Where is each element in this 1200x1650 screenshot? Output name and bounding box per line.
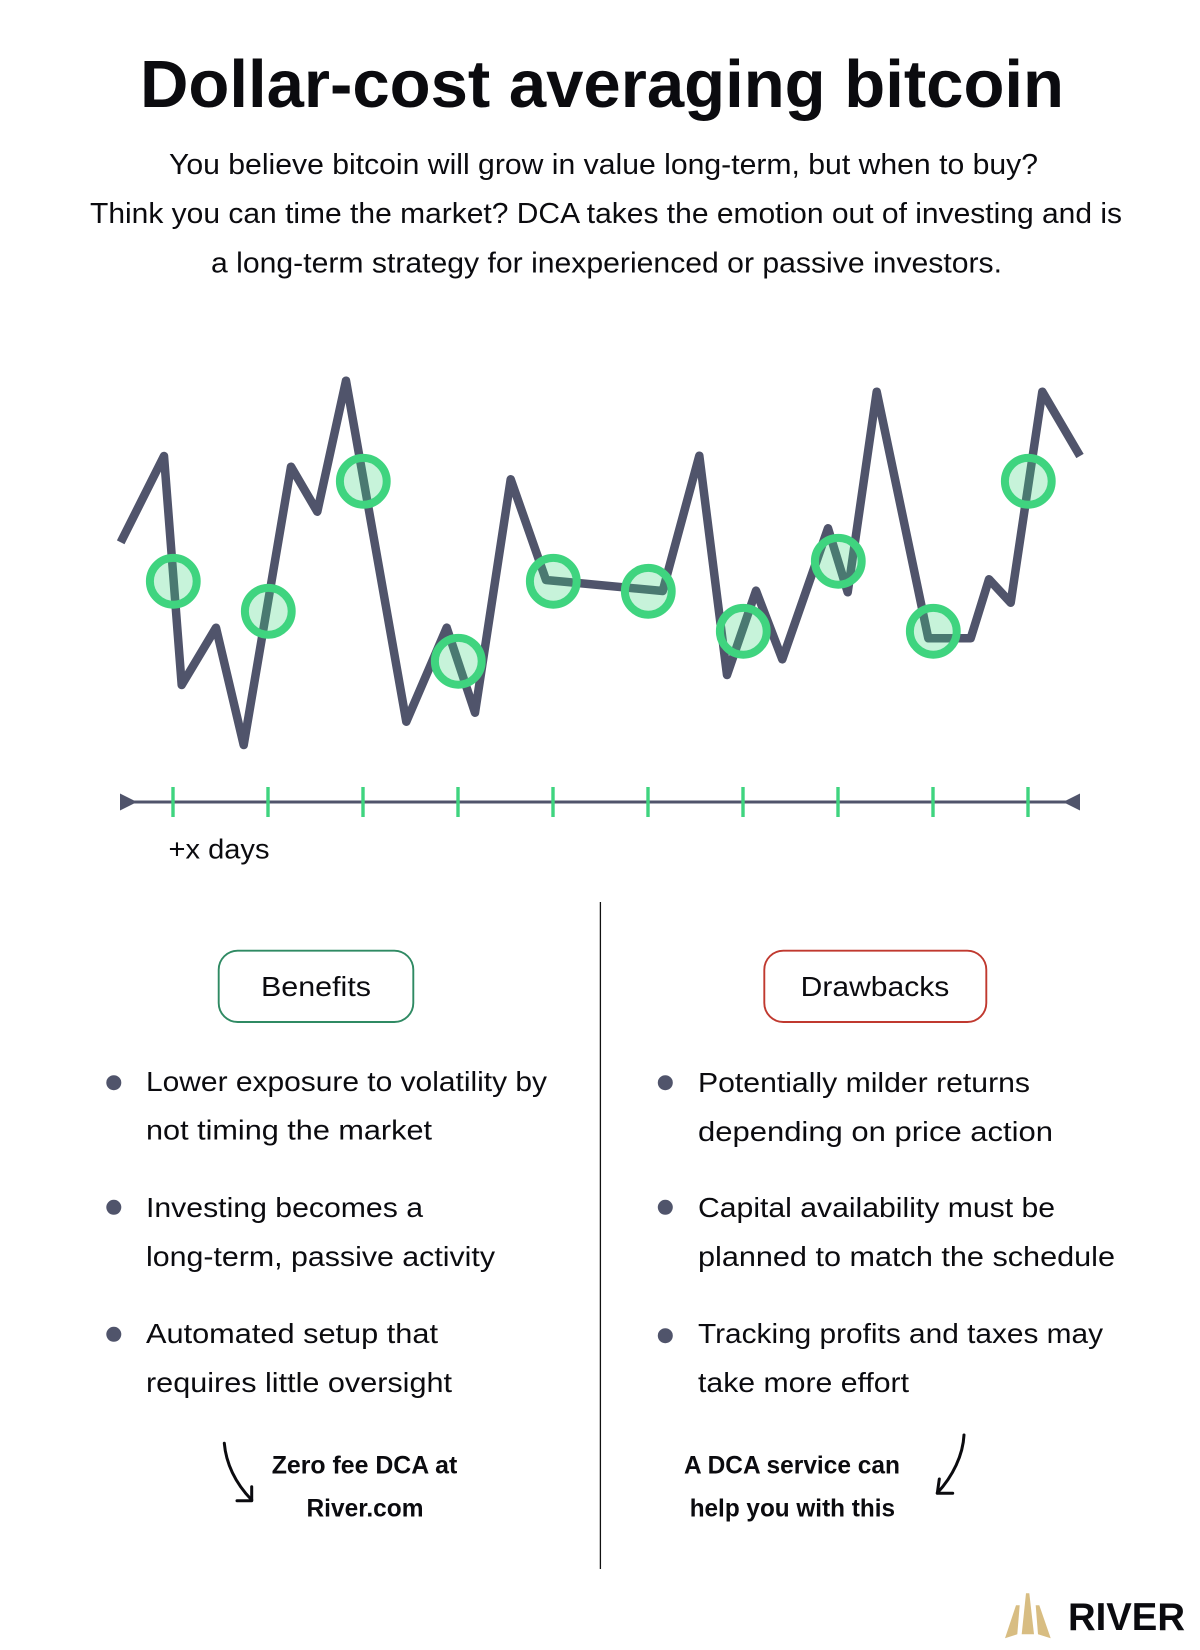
axis label: +x days: [168, 834, 270, 864]
panel: benefits: [106, 951, 547, 1523]
callout: DCA service: help you with this: [690, 1494, 895, 1522]
icon: River mark: [1005, 1593, 1051, 1638]
benefit 2: long-term, passive activity: [146, 1241, 495, 1272]
drawback 3: [658, 1318, 1103, 1398]
intro text block: Think you can time the market? DCA takes the emotion out of investing and is: [90, 198, 1122, 230]
drawback 2: [658, 1192, 1115, 1272]
benefit 3: [106, 1318, 452, 1398]
benefit 1: Lower exposure to volatility by: [146, 1066, 547, 1097]
icon: arrow to River note: [224, 1443, 252, 1501]
callout: zero fee: River.com: [306, 1495, 424, 1523]
drawback 1: Potentially milder returns: [698, 1067, 1030, 1098]
callout: DCA service: A DCA service can: [684, 1452, 900, 1480]
benefit 3: Automated setup that: [146, 1318, 438, 1349]
purchase markers: [150, 458, 1052, 685]
icon: arrow to service note: [937, 1435, 964, 1493]
benefits heading: [219, 951, 413, 1022]
intro text block: You believe bitcoin will grow in value long-term, but when to buy?: [169, 149, 1038, 181]
drawback 1: depending on price action: [698, 1116, 1053, 1147]
benefits heading: Benefits: [261, 971, 371, 1002]
intro text block: a long-term strategy for inexperienced or passive investors.: [211, 248, 1002, 280]
drawbacks heading: [764, 951, 986, 1022]
drawback 2: Capital availability must be: [698, 1192, 1055, 1223]
drawbacks heading: Drawbacks: [801, 971, 949, 1002]
benefit 3: requires little oversight: [146, 1367, 452, 1398]
drawback 3: take more effort: [698, 1367, 909, 1398]
logo: River: [1005, 1593, 1185, 1639]
title: Dollar-cost averaging bitcoin: [140, 47, 1064, 122]
callout: DCA service: [684, 1452, 900, 1522]
benefit 1: [106, 1066, 547, 1146]
drawback 1: [658, 1067, 1053, 1147]
benefit 1: not timing the market: [146, 1115, 432, 1146]
drawback 3: Tracking profits and taxes may: [698, 1318, 1103, 1349]
benefit 2: [106, 1192, 495, 1272]
panel: drawbacks: [658, 951, 1115, 1522]
callout: zero fee: [272, 1452, 458, 1523]
logo: River: RIVER: [1068, 1596, 1185, 1639]
timeline axis with ticks: [120, 787, 1080, 817]
intro text block: [90, 149, 1122, 280]
callout: zero fee: Zero fee DCA at: [272, 1452, 458, 1480]
price line chart: [121, 381, 1080, 745]
drawback 2: planned to match the schedule: [698, 1241, 1115, 1272]
benefit 2: Investing becomes a: [146, 1192, 423, 1223]
